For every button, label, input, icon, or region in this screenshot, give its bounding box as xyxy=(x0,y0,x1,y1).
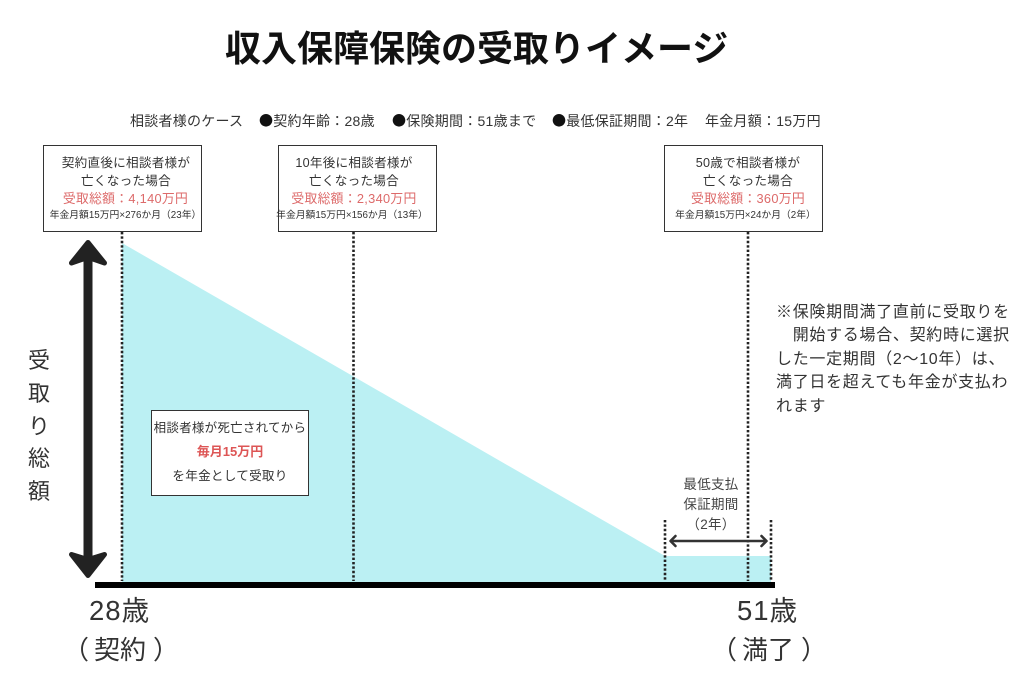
monthly payout callout: を年金として受取り xyxy=(172,469,288,483)
callout: after 10 years: 亡くなった場合 xyxy=(309,174,399,188)
case summary xyxy=(130,111,821,131)
contract age: ●契約年齢：28歳 xyxy=(259,111,375,131)
title: 収入保障保険の受取りイメージ xyxy=(225,28,728,69)
callout: at age 50: 年金月額15万円×24か月（2年） xyxy=(675,210,816,221)
monthly pension: 年金月額：15万円 xyxy=(705,113,821,129)
vertical label: total amount: り xyxy=(28,414,50,439)
callout: at age 50 xyxy=(664,145,823,232)
vertical label: total amount: 総 xyxy=(28,446,50,471)
callout: after 10 years xyxy=(278,145,437,232)
vertical label: total amount: 取 xyxy=(28,381,50,406)
side note: した一定期間（2〜10年）は、 xyxy=(776,351,1005,368)
payout area xyxy=(122,243,771,582)
callout: right after contract: 受取総額：4,140万円 xyxy=(63,191,188,206)
guarantee period label: 保証期間 xyxy=(683,497,739,512)
side note: 満了日を超えても年金が支払わ xyxy=(776,374,1008,391)
callout: right after contract: 年金月額15万円×276か月（23年） xyxy=(50,210,201,221)
arrow: guarantee period xyxy=(670,536,766,546)
side note: ※保険期間満了直前に受取りを xyxy=(776,304,1010,321)
label: maturity: （満了 ） xyxy=(711,635,827,665)
vertical label: total amount: 受 xyxy=(28,348,50,373)
callout: after 10 years: 受取総額：2,340万円 xyxy=(291,191,417,206)
guarantee period label: （2年） xyxy=(686,517,736,532)
age label: 51: 51歳 xyxy=(737,595,798,626)
callout: right after contract: 契約直後に相談者様が xyxy=(62,156,190,170)
callout: after 10 years: 10年後に相談者様が xyxy=(295,156,413,170)
monthly payout callout xyxy=(151,410,309,496)
callout: right after contract xyxy=(43,145,202,232)
age label: 28: 28歳 xyxy=(89,595,150,626)
side note xyxy=(776,303,1010,415)
guarantee period label xyxy=(683,477,739,532)
side note: れます xyxy=(776,398,826,415)
case label: 相談者様のケース xyxy=(130,113,243,129)
callout: at age 50: 50歳で相談者様が xyxy=(696,156,800,170)
side note: 開始する場合、契約時に選択 xyxy=(793,327,1010,344)
timeline axis xyxy=(95,582,775,588)
insurance period: ●保険期間：51歳まで xyxy=(392,111,536,131)
vertical label: total amount xyxy=(28,348,50,504)
callout: after 10 years: 年金月額15万円×156か月（13年） xyxy=(276,210,428,221)
callout: at age 50: 亡くなった場合 xyxy=(703,174,793,188)
callout: right after contract: 亡くなった場合 xyxy=(81,174,171,188)
monthly payout callout: 相談者様が死亡されてから xyxy=(154,421,306,435)
vertical label: total amount: 額 xyxy=(28,479,50,504)
callout: at age 50: 受取総額：360万円 xyxy=(691,191,805,206)
arrow: total amount xyxy=(72,242,104,576)
monthly payout callout: 毎月15万円 xyxy=(197,444,263,459)
minimum guarantee: ●最低保証期間：2年 xyxy=(552,111,688,131)
label: contract: （契約 ） xyxy=(63,635,179,665)
dotted guide lines xyxy=(122,232,771,581)
guarantee period label: 最低支払 xyxy=(683,477,739,492)
